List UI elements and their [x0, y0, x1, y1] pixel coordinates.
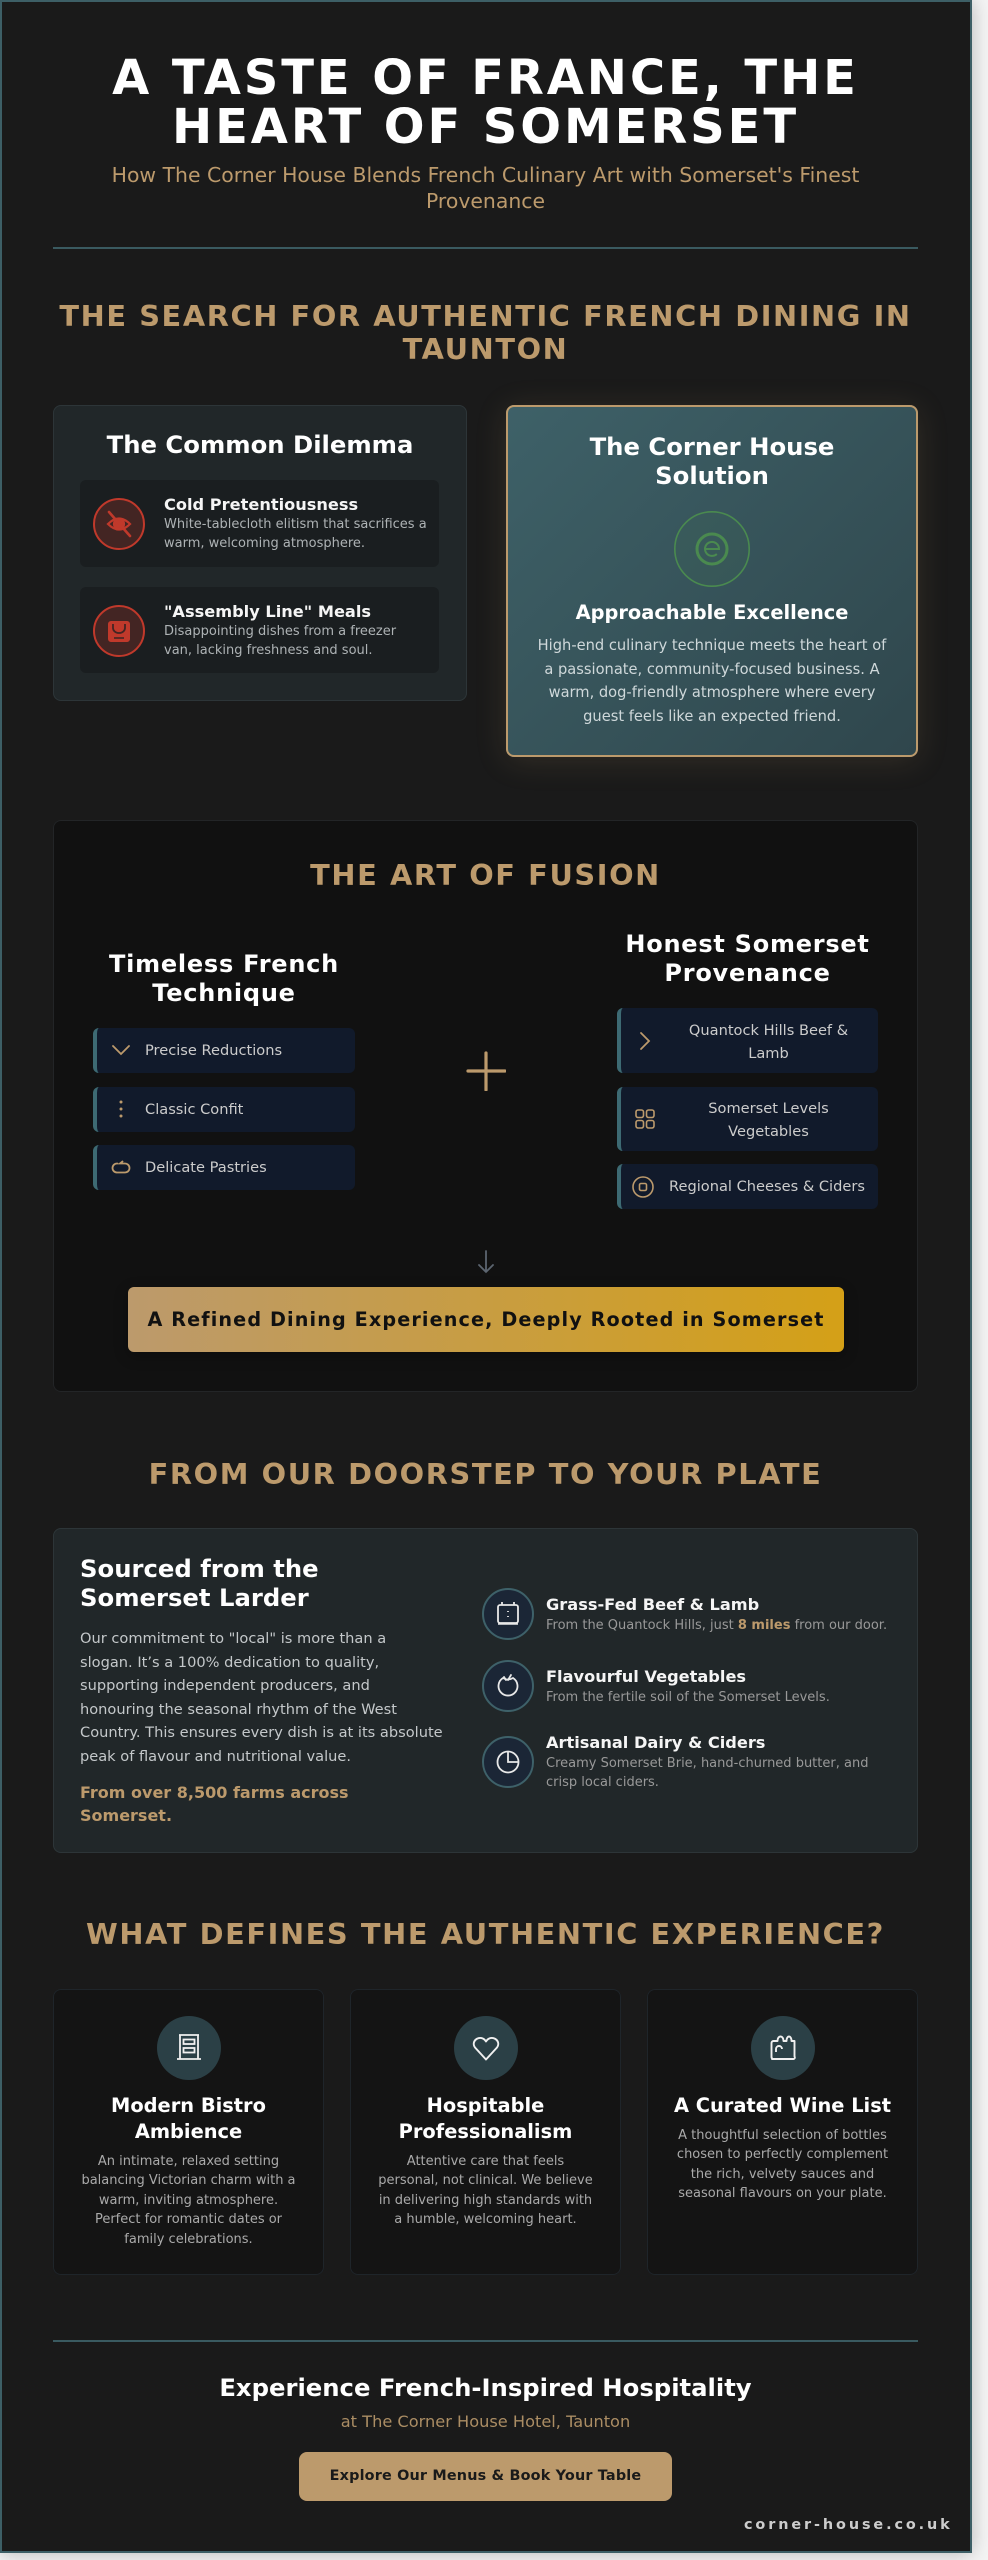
label: Quantock Hills Beef & [689, 1022, 848, 1038]
title: Professionalism [399, 2120, 572, 2143]
icon: round target [632, 1176, 654, 1198]
row: vegetables [482, 1660, 830, 1712]
item: precise reductions [93, 1028, 355, 1073]
description: Disappointing dishes from a freezer [164, 624, 396, 639]
label: Lamb [748, 1044, 789, 1062]
text block: a humble, welcoming heart. [394, 2212, 577, 2227]
icon: pie chart [482, 1736, 534, 1788]
heading: solution: Solution [655, 461, 769, 490]
icon: freezer tray [93, 605, 145, 657]
text block: guest feels like an expected friend. [583, 708, 841, 725]
title [112, 50, 859, 155]
heading: somerset provenance: Honest Somerset [625, 930, 870, 958]
description: van, lacking freshness and soul. [164, 643, 373, 658]
icon: chevron right [640, 1032, 650, 1050]
description: White-tablecloth elitism that sacrifices a [164, 517, 427, 532]
panel: somerset larder [53, 1528, 918, 1853]
icon: dots [120, 1100, 122, 1118]
heading: somerset provenance [625, 930, 870, 987]
text block: warm, inviting atmosphere. [99, 2193, 278, 2208]
description: Creamy Somerset Brie, hand-churned butter, and [546, 1756, 868, 1771]
text block [538, 637, 887, 725]
icon: grid [635, 1109, 655, 1129]
text block: a passionate, community-focused business. A [544, 661, 880, 678]
title: A TASTE OF FRANCE, THE [112, 50, 859, 106]
label: Classic Confit [145, 1101, 243, 1118]
callout: farms: Somerset. [80, 1806, 172, 1825]
card: modern bistro ambience [53, 1989, 324, 2275]
callout: farms: From over 8,500 farms across [80, 1783, 349, 1802]
heading: larder [80, 1554, 319, 1612]
text block: family celebrations. [124, 2232, 253, 2247]
row: dairy and ciders [482, 1732, 868, 1790]
title: Ambience [135, 2120, 242, 2143]
title: Hospitable [427, 2094, 544, 2117]
text block: in delivering high standards with [379, 2193, 592, 2208]
text block: the rich, velvety sauces and [691, 2167, 874, 2182]
row: beef and lamb [482, 1588, 887, 1640]
text block: warm, dog-friendly atmosphere where every [549, 684, 875, 701]
heading: authentic experience: WHAT DEFINES THE AUTHENTIC EXPERIENCE? [86, 1917, 885, 1951]
text block: personal, not clinical. We believe [378, 2173, 593, 2188]
icon: calendar [482, 1588, 534, 1640]
title: HEART OF SOMERSET [172, 99, 799, 155]
footer subheading: at The Corner House Hotel, Taunton [341, 2412, 630, 2430]
icon: approachable excellence [674, 511, 750, 587]
subheading: Approachable Excellence [576, 601, 848, 624]
heading: the search [59, 299, 912, 366]
website url: corner-house.co.uk [744, 2517, 953, 2533]
heading: solution: The Corner House [590, 432, 834, 461]
text block: commitment: honouring the seasonal rhythm of the West [80, 1701, 397, 1718]
subtitle: Provenance [426, 188, 545, 212]
text block: seasonal flavours on your plate. [678, 2186, 887, 2201]
heading: larder: Sourced from the [80, 1554, 319, 1583]
text block: commitment: supporting independent producers, and [80, 1677, 370, 1694]
item: quantock hills [617, 1008, 878, 1073]
title: Modern Bistro [111, 2094, 266, 2117]
description: From the Quantock Hills, just 8 miles from our door. [546, 1618, 887, 1633]
text: cold pretentiousness: Cold Pretentiousness [164, 494, 358, 514]
panel: the common dilemma [53, 405, 467, 701]
row: cold pretentiousness [80, 480, 439, 567]
text block: commitment [80, 1630, 443, 1765]
button: explore menus [299, 2452, 672, 2501]
heading: art of fusion: THE ART OF FUSION [310, 858, 661, 892]
panel: the art of fusion [53, 820, 918, 1392]
heading: french technique: Timeless French [109, 950, 339, 978]
result bar: A Refined Dining Experience, Deeply Rooted in Somerset [147, 1308, 825, 1331]
icon: cabinet [157, 2016, 221, 2080]
icon: apple [482, 1660, 534, 1712]
heading: the search: THE SEARCH FOR AUTHENTIC FRENCH DINING IN [59, 299, 912, 333]
label: Somerset Levels [708, 1100, 829, 1116]
heading: somerset provenance: Provenance [664, 959, 831, 987]
card: hospitable professionalism [350, 1989, 621, 2275]
button: explore menus: Explore Our Menus & Book Your Table [330, 2468, 641, 2484]
label: Regional Cheeses & Ciders [669, 1178, 865, 1195]
result bar [128, 1287, 844, 1352]
label: Precise Reductions [145, 1042, 282, 1059]
text block [378, 2154, 593, 2227]
heading: french technique [109, 950, 339, 1007]
heading: the search: TAUNTON [403, 332, 568, 366]
description: warm, welcoming atmosphere. [164, 536, 365, 551]
description: crisp local ciders. [546, 1775, 659, 1790]
text block [81, 2154, 296, 2247]
title: A Curated Wine List [674, 2094, 891, 2117]
text block: balancing Victorian charm with a [81, 2173, 296, 2188]
subtitle: How The Corner House Blends French Culinary Art with Somerset's Finest [112, 163, 859, 187]
text block: High-end culinary technique meets the heart of [538, 637, 886, 654]
item: delicate pastries [93, 1145, 355, 1190]
text block: A thoughtful selection of bottles [678, 2128, 887, 2143]
label: Vegetables [728, 1122, 809, 1140]
text: assembly line: "Assembly Line" Meals [164, 602, 371, 620]
label: Delicate Pastries [145, 1159, 267, 1176]
description [164, 624, 396, 658]
text block: commitment: slogan. It’s a 100% dedication to quality, [80, 1654, 379, 1671]
title [111, 2094, 266, 2143]
description [164, 517, 427, 551]
text block [647, 2126, 918, 2204]
panel: the corner house solution [506, 405, 918, 757]
text block: commitment: Country. This ensures every dish is at its absolute [80, 1724, 443, 1741]
label [708, 1100, 829, 1140]
title [399, 2094, 572, 2143]
heading: larder: Somerset Larder [80, 1583, 309, 1612]
icon: pastry loop [112, 1160, 130, 1174]
text: vegetables: Flavourful Vegetables [546, 1666, 746, 1686]
item: classic confit [93, 1087, 355, 1132]
icon: plus [466, 1051, 506, 1091]
text block: commitment: Our commitment to "local" is more than a [80, 1630, 386, 1647]
text block: An intimate, relaxed setting [98, 2154, 279, 2169]
text: beef and lamb: Grass-Fed Beef & Lamb [546, 1594, 759, 1614]
description: From the fertile soil of the Somerset Levels. [546, 1690, 830, 1705]
icon: heart [454, 2016, 518, 2080]
item: somerset levels [617, 1087, 878, 1151]
icon: chevron down [112, 1045, 130, 1056]
description [546, 1756, 868, 1790]
heading: doorstep: FROM OUR DOORSTEP TO YOUR PLATE [149, 1457, 822, 1491]
text block: Perfect for romantic dates or [95, 2212, 282, 2227]
row: assembly line meals [80, 587, 439, 673]
heading: french technique: Technique [152, 979, 296, 1007]
subtitle [112, 163, 859, 212]
card: a curated wine list [647, 1989, 918, 2275]
text block: Attentive care that feels [407, 2154, 564, 2169]
footer heading: Experience French-Inspired Hospitality [219, 2372, 752, 2402]
heading: common dilemma: The Common Dilemma [107, 430, 413, 459]
text block: chosen to perfectly complement [677, 2147, 888, 2162]
icon: crossed-out eye [93, 498, 145, 550]
item: regional cheeses [617, 1164, 878, 1209]
arrow: down [478, 1250, 494, 1274]
text: dairy and ciders: Artisanal Dairy & Ciders [546, 1732, 765, 1752]
label [689, 1022, 848, 1062]
heading: solution [590, 432, 834, 490]
icon: wine map [751, 2016, 815, 2080]
text block: commitment: peak of flavour and nutritional value. [80, 1748, 351, 1765]
callout: farms [80, 1783, 349, 1825]
